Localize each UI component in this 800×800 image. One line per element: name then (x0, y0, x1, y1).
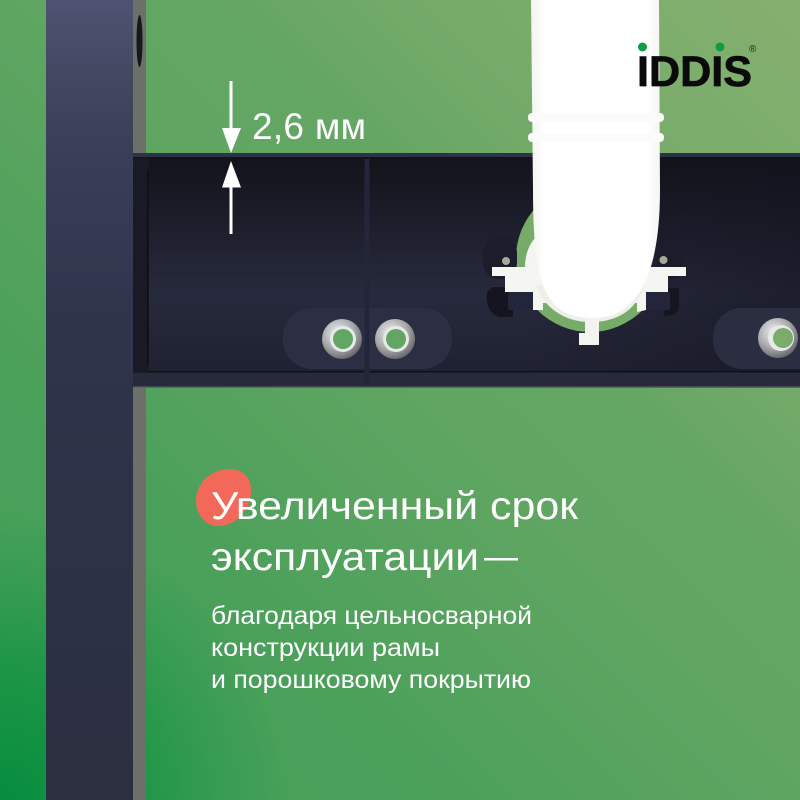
logo: IDDIS: ® (749, 44, 757, 55)
bolts (322, 318, 798, 359)
frame: horizontal beam (133, 153, 800, 388)
subheading: благодаря цельносварной (211, 602, 532, 630)
heading: Увеличенный срок (211, 485, 579, 528)
subheading: и порошковому покрытию (211, 666, 531, 694)
dimension arrows (222, 81, 241, 234)
pipe body (531, 0, 660, 318)
white inner edge of hole (525, 238, 538, 268)
subheading: конструкции рамы (211, 634, 440, 662)
coral accent blob (196, 469, 251, 526)
heading: эксплуатации (211, 536, 479, 579)
side knobs (483, 237, 517, 279)
pipe ribs (528, 113, 664, 122)
heading (211, 485, 579, 579)
green hole behind pipe (516, 210, 642, 332)
vertical divider (364, 159, 370, 383)
drain pipe assembly (483, 0, 686, 345)
logo: IDDIS: IDDIS (637, 48, 752, 96)
mounting pad left (283, 308, 452, 369)
mounting pad right (713, 308, 800, 369)
frame: vertical column (46, 0, 146, 800)
bracket (492, 267, 686, 312)
subheading (211, 602, 532, 694)
dimension label: 2,6 мм (252, 106, 366, 147)
lower clips (487, 287, 679, 317)
pipe collar (536, 285, 645, 322)
drain spout (579, 318, 599, 345)
